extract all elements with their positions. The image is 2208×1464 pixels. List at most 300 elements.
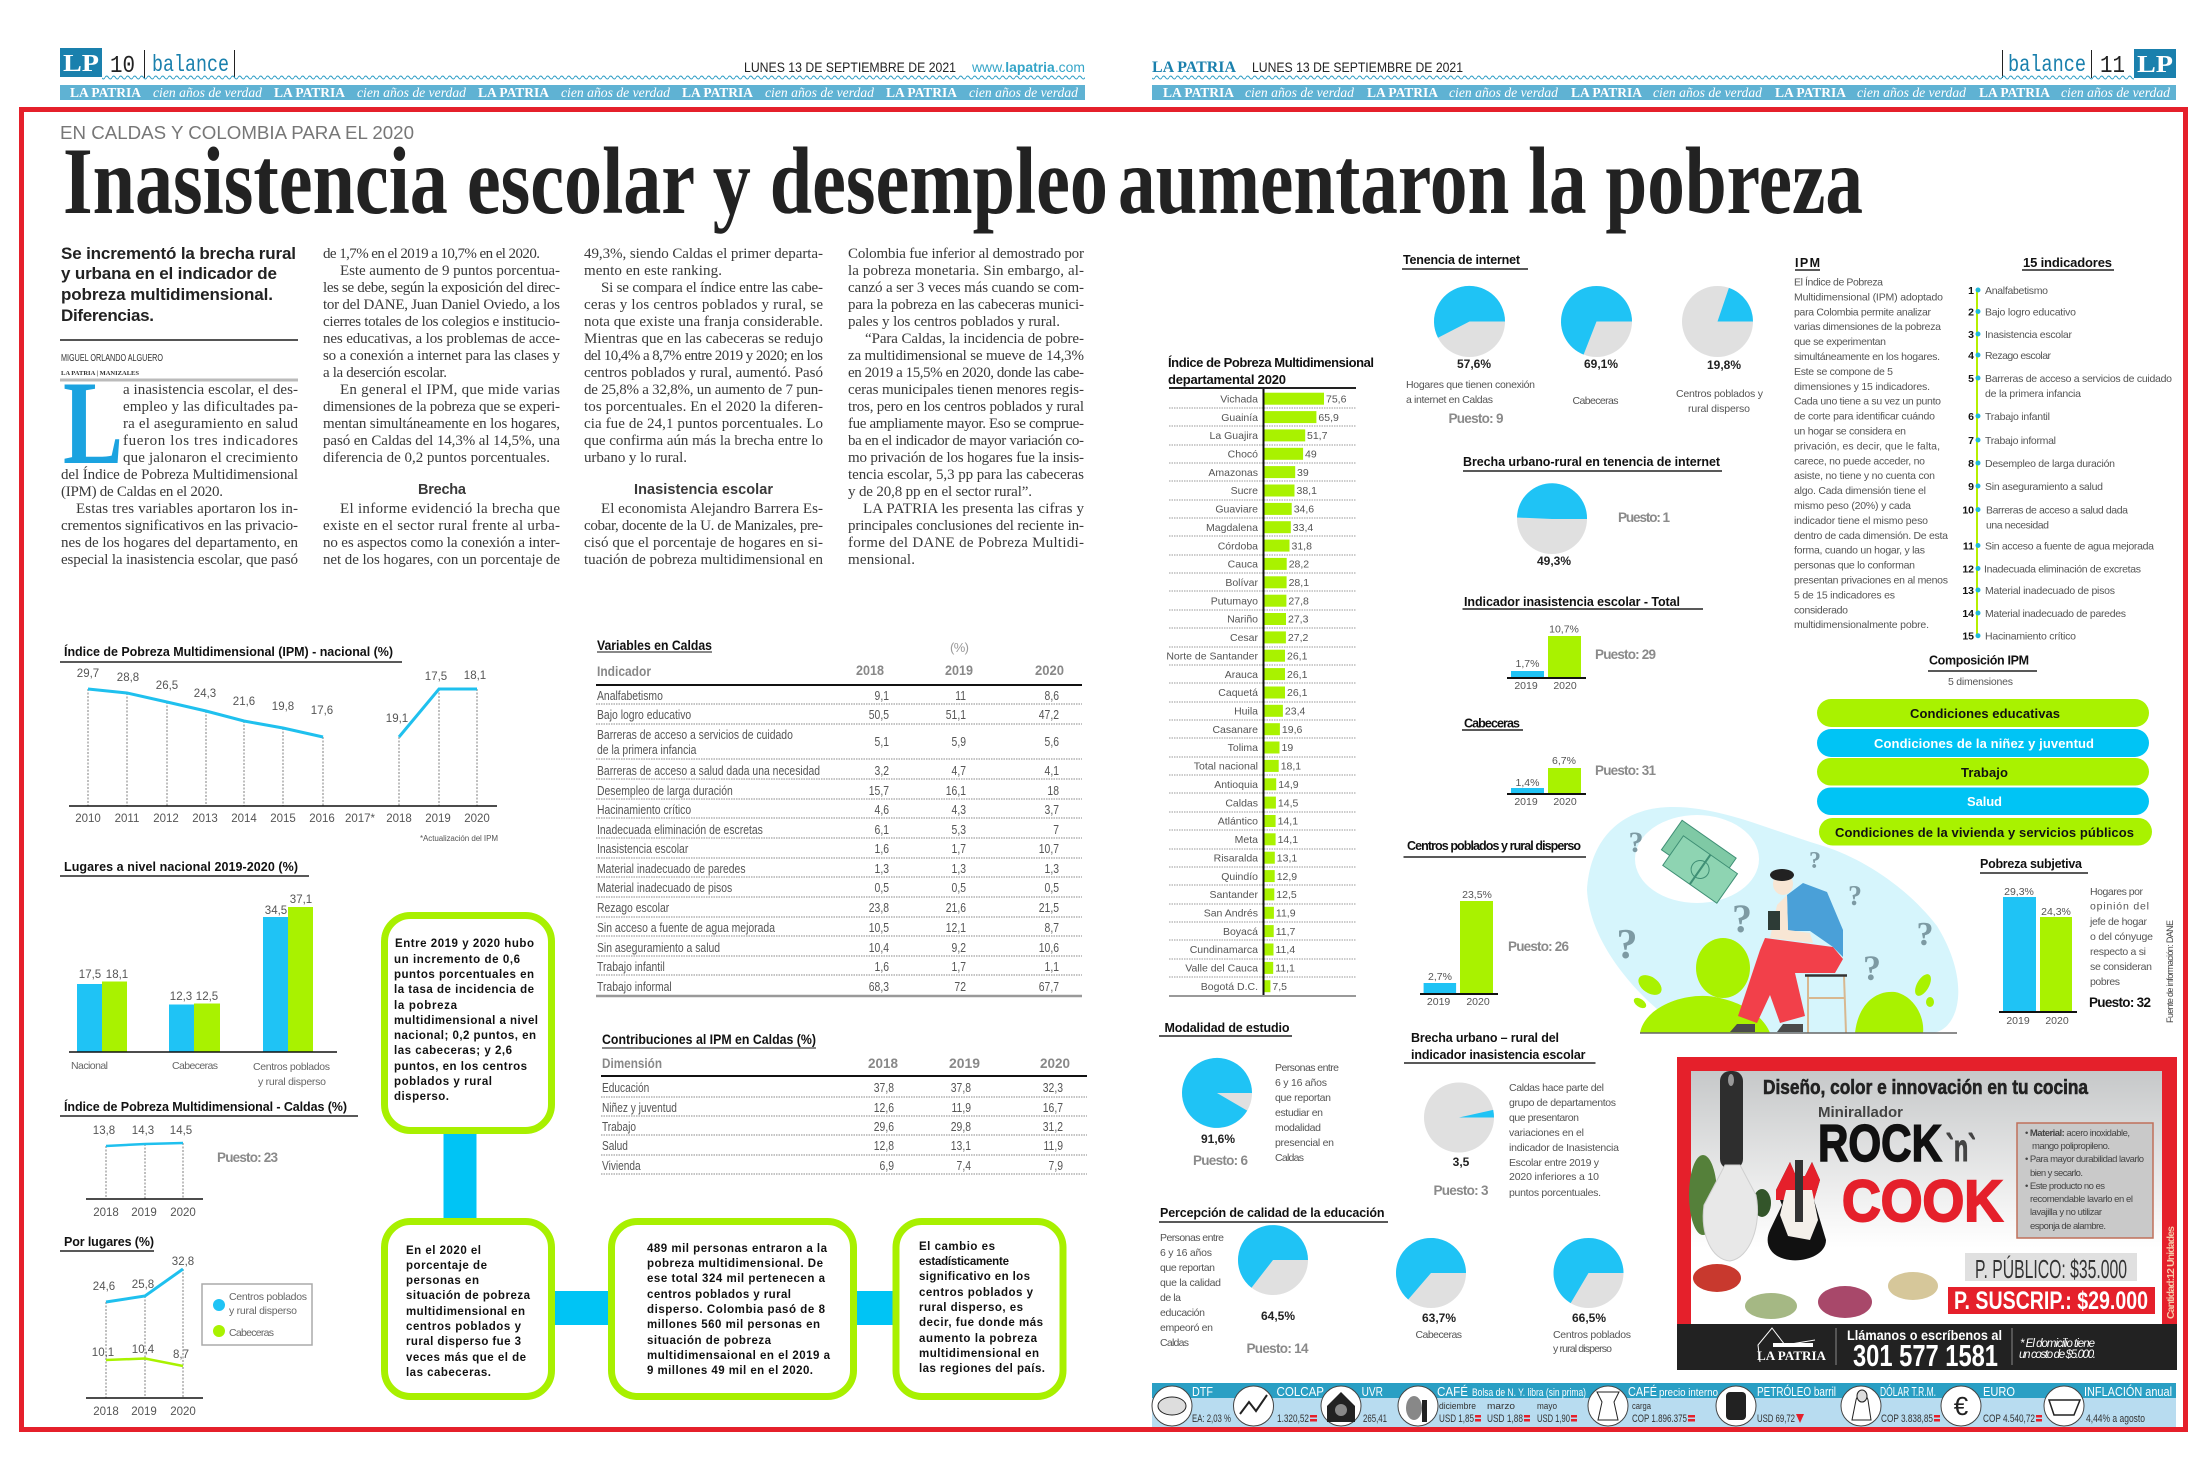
article column 2: net de los hogares, con un porcentaje de bbox=[323, 552, 560, 568]
IPM text: dentro de cada dimensión. De esta bbox=[1794, 530, 1948, 542]
ticker values: 265,41 bbox=[1363, 1413, 1387, 1425]
department values: 49 bbox=[1305, 448, 1317, 460]
article column 3 bbox=[584, 246, 824, 568]
pie 57,6%: 57,6% bbox=[1457, 357, 1491, 371]
ticker values: diciembre bbox=[1439, 1401, 1476, 1411]
rank: Puesto: 14 bbox=[1246, 1341, 1309, 1356]
header: right page masthead bbox=[1152, 49, 2176, 100]
article column 4: ceras municipales tienen menores regis- bbox=[848, 382, 1084, 398]
ticker values: COP 4.540,72 bbox=[1983, 1413, 2035, 1425]
department values: 14,1 bbox=[1278, 834, 1298, 846]
callout box 1: la pobreza bbox=[394, 1000, 458, 1012]
article column 3: mento en este ranking. bbox=[584, 263, 722, 279]
article column 2: dimensiones de la pobreza que se experi- bbox=[323, 399, 560, 415]
department values: 26,1 bbox=[1287, 669, 1308, 681]
article column 3: tos porcentuales. En el 2020 la diferen- bbox=[584, 399, 823, 415]
pie captions: rural disperso bbox=[1688, 403, 1750, 415]
panel: IPM nacional line chart bbox=[60, 644, 498, 843]
department values: 11,9 bbox=[1276, 908, 1296, 920]
delivery note: un costo de $5.000. bbox=[2019, 1349, 2096, 1361]
description: pobres bbox=[2090, 976, 2120, 988]
rank: Puesto: 3 bbox=[1434, 1183, 1489, 1198]
numbers: 13 bbox=[1962, 585, 1974, 597]
heading centros: Centros poblados y rural disperso bbox=[1407, 839, 1581, 853]
row labels: Salud bbox=[602, 1139, 628, 1153]
callout box 4: multidimensional en bbox=[919, 1348, 1039, 1360]
panel: pobreza subjetiva bbox=[1980, 857, 2153, 1027]
callout box 2: situación de pobreza bbox=[406, 1290, 531, 1302]
line series 2018-2020 bbox=[399, 689, 477, 737]
pie 66,5% bbox=[1553, 1238, 1631, 1355]
contact bar bbox=[1677, 1324, 2177, 1373]
heading departmental bbox=[1168, 355, 1374, 387]
department names: Caldas bbox=[1225, 797, 1258, 809]
bar values: 18,1 bbox=[106, 969, 128, 981]
values Caldas bbox=[93, 1125, 196, 1219]
2019 values: 11,9 bbox=[952, 1101, 971, 1115]
2020 values bbox=[1043, 1081, 1063, 1173]
pie 49,3% bbox=[1517, 483, 1587, 568]
ticker values: USD 1,85 bbox=[1439, 1413, 1474, 1425]
pie 49,3%: 49,3% bbox=[1537, 554, 1571, 568]
article column 2: En general el IPM, que mide varias bbox=[340, 382, 560, 398]
callout box 1: un incremento de 0,6 bbox=[394, 954, 520, 966]
2020 values: 1,3 bbox=[1045, 862, 1059, 876]
values: 21,6 bbox=[233, 696, 255, 708]
panel: brecha urbano-rural inasistencia bbox=[1404, 1031, 1619, 1199]
heading por lugares: Por lugares (%) bbox=[64, 1235, 154, 1249]
pill: vivienda: Condiciones de la vivienda y servicios públicos bbox=[1835, 825, 2134, 840]
callout box 2: personas en bbox=[406, 1275, 479, 1287]
LP logo left: LP bbox=[63, 51, 99, 77]
row labels: Niñez y juventud bbox=[602, 1101, 677, 1115]
row labels bbox=[602, 1081, 677, 1173]
band right: LA PATRIA bbox=[1775, 85, 1846, 100]
years: 2011 bbox=[115, 813, 139, 825]
indicator labels: Inasistencia escolar bbox=[1985, 329, 2072, 341]
2018 values: 6,9 bbox=[880, 1159, 894, 1173]
table title bbox=[597, 637, 969, 655]
row labels: Barreras de acceso a salud dada una necesidad bbox=[597, 764, 820, 778]
indicator labels: Material inadecuado de paredes bbox=[1985, 608, 2126, 620]
article column 2: a la deserción escolar. bbox=[323, 365, 447, 381]
bar values bbox=[79, 894, 312, 1003]
article column 4: za multidimensional se mueve de 14,3% bbox=[848, 348, 1084, 364]
legend: y rural disperso bbox=[229, 1305, 297, 1317]
callout box 1: la tasa de incidencia de bbox=[394, 984, 534, 996]
byline bbox=[60, 340, 298, 380]
values bbox=[77, 668, 486, 725]
years: 2015 bbox=[270, 813, 296, 825]
LP logo left bbox=[60, 48, 102, 77]
values: 2019 bbox=[1514, 680, 1538, 692]
table header: 2018 bbox=[868, 1056, 898, 1071]
department values: 27,3 bbox=[1288, 614, 1309, 626]
numbers: 7 bbox=[1968, 435, 1974, 447]
numbers bbox=[1962, 285, 1974, 643]
values: 2019 bbox=[1427, 996, 1450, 1008]
values bbox=[1427, 889, 1492, 1008]
values por lugares: 8,7 bbox=[173, 1349, 189, 1361]
callout box 1: Entre 2019 y 2020 hubo bbox=[395, 938, 534, 950]
band right: LA PATRIA bbox=[1367, 85, 1438, 100]
ticker headings: UVR bbox=[1362, 1384, 1383, 1399]
department values: 14,1 bbox=[1278, 816, 1298, 828]
IPM text: dimensiones y 15 indicadores. bbox=[1794, 381, 1930, 393]
article column 3: cobar, docente de la U. de Manizales, pre- bbox=[584, 518, 823, 534]
band right: LA PATRIA bbox=[1979, 85, 2050, 100]
panel: por lugares line chart bbox=[60, 1235, 312, 1418]
department names: Caquetá bbox=[1218, 687, 1258, 699]
article column 4: tencia escolar, 5,3 pp para las cabeceras bbox=[848, 467, 1084, 483]
description: de la bbox=[1160, 1292, 1181, 1304]
article column 3: cisó que el porcentaje de hogares en si- bbox=[584, 535, 823, 551]
question marks: ? bbox=[1848, 881, 1862, 912]
2018 values: 4,6 bbox=[875, 803, 889, 817]
callout box 2 bbox=[384, 1222, 552, 1396]
indicator labels: de la primera infancia bbox=[1985, 388, 2081, 400]
question marks bbox=[1616, 826, 1934, 988]
department names: Huila bbox=[1234, 706, 1258, 718]
delivery note bbox=[2019, 1338, 2096, 1361]
department names: Guainía bbox=[1221, 412, 1258, 424]
callout box 3: multidimensaional en el 2019 a bbox=[647, 1350, 831, 1362]
phone number: 301 577 1581 bbox=[1853, 1338, 1998, 1373]
values: 2020 bbox=[1466, 996, 1490, 1008]
panel: IPM explanation bbox=[1794, 256, 1948, 631]
page number 10 and section name: balance bbox=[152, 52, 229, 78]
2020 values: 1,1 bbox=[1045, 960, 1059, 974]
2018 values: 23,8 bbox=[869, 901, 889, 915]
department values: 34,6 bbox=[1294, 504, 1314, 516]
band left: LA PATRIA bbox=[682, 85, 753, 100]
timeline line bbox=[1976, 290, 1978, 636]
department values: 14,9 bbox=[1278, 779, 1299, 791]
pill: condiciones educativas: Condiciones educativas bbox=[1910, 706, 2060, 721]
row labels: de la primera infancia bbox=[597, 743, 697, 757]
panel: tenencia de internet bbox=[1402, 253, 1764, 426]
2019 values: 29,8 bbox=[951, 1120, 971, 1134]
ticker values: USD 69,72 bbox=[1757, 1413, 1795, 1425]
callout box 4: decir, fue donde más bbox=[919, 1317, 1043, 1329]
question marks: ? bbox=[1616, 922, 1638, 968]
article column 1: empleo y las dificultades pa- bbox=[123, 399, 298, 415]
numbers: 12 bbox=[1962, 564, 1974, 576]
line cabeceras bbox=[106, 1358, 183, 1366]
department names: Córdoba bbox=[1218, 540, 1258, 552]
values: 26,5 bbox=[156, 680, 178, 692]
article column 3: El economista Alejandro Barrera Es- bbox=[601, 501, 823, 517]
article column 2: les se debe, según la exposición del direc- bbox=[323, 280, 560, 296]
heading brecha inasistencia bbox=[1404, 1031, 1596, 1063]
numbers: 5 bbox=[1968, 373, 1974, 385]
article column 4: para la pobreza en las cabeceras munici- bbox=[848, 297, 1084, 313]
values: 19,8 bbox=[272, 701, 294, 713]
department names: Tolima bbox=[1228, 742, 1258, 754]
line centros poblados bbox=[106, 1269, 183, 1302]
pie 69,1% bbox=[1561, 286, 1632, 371]
ticker values: carga bbox=[1632, 1401, 1651, 1411]
description: que la calidad bbox=[1160, 1277, 1221, 1289]
man figure bbox=[1730, 869, 1843, 1032]
2020 values: 47,2 bbox=[1039, 708, 1059, 722]
IPM text: Este se compone de 5 bbox=[1794, 366, 1893, 378]
values por lugares: 2019 bbox=[131, 1406, 157, 1418]
callout box 4: las regiones del país. bbox=[919, 1363, 1045, 1375]
ticker headings: DÓLAR T.R.M. bbox=[1880, 1384, 1936, 1399]
department names: Sucre bbox=[1231, 485, 1258, 497]
2018 values: 68,3 bbox=[869, 980, 889, 994]
department names: Casanare bbox=[1212, 724, 1258, 736]
category labels: Nacional bbox=[71, 1060, 108, 1072]
heading IPM Caldas: Índice de Pobreza Multidimensional - Caldas (%) bbox=[64, 1099, 347, 1114]
article column 2: cierres totales de los colegios e institucio- bbox=[323, 314, 560, 330]
band left: LA PATRIA bbox=[886, 85, 957, 100]
section name and page number 11: balance bbox=[2008, 52, 2086, 78]
food: lettuce bbox=[1689, 1155, 1771, 1235]
values Caldas: 13,8 bbox=[93, 1125, 115, 1137]
values: 28,8 bbox=[117, 672, 139, 684]
legend: Cabeceras bbox=[229, 1327, 274, 1339]
IPM text: algo. Cada dimensión tiene el bbox=[1794, 485, 1926, 497]
Cook logo: COOK bbox=[1842, 1169, 2003, 1234]
department values: 27,8 bbox=[1288, 595, 1309, 607]
description: estudiar en bbox=[1275, 1107, 1323, 1119]
rank: Puesto: 23 bbox=[217, 1150, 278, 1165]
ticker values: USD 1,90 bbox=[1537, 1413, 1570, 1425]
description: Personas entre bbox=[1275, 1062, 1339, 1074]
department names: Meta bbox=[1235, 834, 1258, 846]
values: 6,7% bbox=[1552, 755, 1576, 767]
2019 values: 11 bbox=[955, 689, 966, 703]
bar values: 12,3 bbox=[170, 991, 192, 1003]
date and url left: www.lapatria.com bbox=[971, 59, 1085, 75]
2018 values: 6,1 bbox=[875, 823, 889, 837]
band left: LA PATRIA bbox=[478, 85, 549, 100]
values: 18,1 bbox=[464, 670, 486, 682]
section name and page number 11 bbox=[2002, 50, 2125, 80]
description: se consideran bbox=[2090, 961, 2152, 973]
table: variables en Caldas bbox=[596, 637, 1082, 996]
row labels: Barreras de acceso a servicios de cuidado bbox=[597, 728, 793, 742]
pie 3,5 bbox=[1424, 1082, 1494, 1169]
heading cabeceras: Cabeceras bbox=[1464, 716, 1520, 730]
byline: MIGUEL ORLANDO ALGUERO bbox=[61, 353, 163, 364]
numbers: 2 bbox=[1968, 306, 1974, 318]
values: 2019 bbox=[2006, 1015, 2030, 1027]
heading brecha inasistencia: indicador inasistencia escolar bbox=[1411, 1048, 1586, 1062]
panel: centros poblados bars bbox=[1404, 839, 1586, 1008]
heading 15 indicadores: 15 indicadores bbox=[2023, 255, 2112, 270]
department values: 11,7 bbox=[1276, 926, 1296, 938]
IPM text: varias dimensiones de la pobreza bbox=[1794, 321, 1941, 333]
grater bbox=[1703, 1071, 1758, 1261]
2020 values: 5,6 bbox=[1045, 735, 1059, 749]
IPM text: para Colombia permite analizar bbox=[1794, 306, 1932, 318]
heading tenencia: Tenencia de internet bbox=[1403, 253, 1521, 267]
department values: 27,2 bbox=[1288, 632, 1308, 644]
description: que reportan bbox=[1160, 1262, 1215, 1274]
values: 1,7% bbox=[1516, 658, 1539, 670]
years: 2013 bbox=[192, 813, 218, 825]
2019 values: 1,7 bbox=[952, 842, 966, 856]
connector horizontal 2 bbox=[857, 1291, 893, 1325]
call to action: Llámanos o escríbenos al bbox=[1847, 1327, 2002, 1343]
pie 64,5% bbox=[1238, 1225, 1308, 1323]
description bbox=[1275, 1062, 1339, 1164]
IPM text: mismo peso (20%) y cada bbox=[1794, 500, 1911, 512]
2020 values: 7,9 bbox=[1049, 1159, 1063, 1173]
LP logo right: LP bbox=[2137, 52, 2173, 78]
question marks: ? bbox=[1916, 916, 1934, 953]
values Caldas: 2020 bbox=[170, 1207, 196, 1219]
indicator labels: Barreras de acceso a salud dada bbox=[1986, 505, 2128, 517]
food piles bbox=[1693, 1264, 1938, 1319]
2018 values: 1,3 bbox=[875, 862, 889, 876]
article column 2: de 1,7% en el 2019 a 10,7% en el 2020. bbox=[323, 246, 540, 262]
department values: 26,1 bbox=[1287, 650, 1308, 662]
title: aumentaron la pobreza bbox=[1118, 128, 1863, 234]
table header: Dimensión bbox=[602, 1056, 662, 1071]
thought cloud bbox=[1635, 815, 1759, 903]
band left: LA PATRIA bbox=[70, 85, 141, 100]
2018 values: 3,2 bbox=[875, 764, 889, 778]
pie captions: Hogares que tienen conexión bbox=[1406, 379, 1535, 391]
2019 values: 16,1 bbox=[946, 784, 966, 798]
indicator labels: Inadecuada eliminación de excretas bbox=[1984, 564, 2141, 576]
deck bbox=[61, 244, 296, 325]
row labels: Trabajo infantil bbox=[597, 960, 665, 974]
values: 2020 bbox=[1553, 796, 1577, 808]
department values: 11,4 bbox=[1276, 944, 1295, 956]
ticker headings: Bolsa de N. Y. libra (sin prima) bbox=[1472, 1387, 1586, 1399]
legend bbox=[202, 1284, 312, 1345]
kicker: EN CALDAS Y COLOMBIA PARA EL 2020 bbox=[60, 123, 414, 143]
pie captions: Centros poblados y bbox=[1676, 388, 1764, 400]
department names: Bogotá D.C. bbox=[1201, 981, 1258, 993]
values bbox=[1514, 624, 1579, 692]
indicator labels: Sin acceso a fuente de agua mejorada bbox=[1985, 540, 2154, 552]
description: o del cónyuge bbox=[2090, 931, 2153, 943]
article column 4 bbox=[848, 246, 1084, 568]
department values: 7,5 bbox=[1272, 981, 1287, 993]
ticker headings: EURO bbox=[1983, 1384, 2015, 1399]
specs box bbox=[2017, 1123, 2153, 1238]
years: 2017* bbox=[345, 813, 376, 825]
numbers: 9 bbox=[1968, 481, 1974, 493]
2019 values: 13,1 bbox=[951, 1139, 971, 1153]
years: 2012 bbox=[153, 813, 179, 825]
department values: 75,6 bbox=[1326, 393, 1347, 405]
values por lugares: 25,8 bbox=[132, 1279, 154, 1291]
indicator labels: Trabajo informal bbox=[1985, 435, 2056, 447]
IPM text: Multidimensional (IPM) adoptado bbox=[1794, 291, 1943, 303]
IPM text: un hogar se considera en bbox=[1794, 426, 1906, 438]
department values: 11,1 bbox=[1275, 963, 1295, 975]
pie 19,8% bbox=[1682, 286, 1753, 372]
values por lugares: 32,8 bbox=[172, 1256, 194, 1268]
row labels: Hacinamiento crítico bbox=[597, 803, 692, 817]
article column 4: mensional. bbox=[848, 552, 915, 568]
deck: y urbana en el indicador de bbox=[61, 264, 277, 283]
panel: IPM Caldas line chart bbox=[60, 1099, 358, 1219]
numbers: 11 bbox=[1963, 540, 1974, 552]
heading departmental: departamental 2020 bbox=[1168, 372, 1286, 387]
ticker icons bbox=[1152, 1386, 2084, 1426]
subscriber price: P. SUSCRIP.: $29.000 bbox=[1954, 1287, 2148, 1315]
ticker headings: CAFÉ bbox=[1437, 1384, 1468, 1399]
category labels bbox=[71, 1060, 330, 1088]
pie 64,5%: 64,5% bbox=[1261, 1309, 1295, 1323]
numbers: 14 bbox=[1962, 608, 1974, 620]
indicator labels: Barreras de acceso a servicios de cuidado bbox=[1985, 373, 2172, 385]
article column 3: Inasistencia escolar bbox=[634, 482, 773, 498]
department values: 19,6 bbox=[1282, 724, 1302, 736]
specs box: • Para mayor durabilidad lavarlo bbox=[2025, 1154, 2144, 1165]
2018 values: 10,4 bbox=[869, 941, 889, 955]
callout box 1: nacional; 0,2 puntos, en bbox=[394, 1030, 536, 1042]
years: 2020 bbox=[464, 813, 490, 825]
table header: 2020 bbox=[1040, 1056, 1070, 1071]
2020 values bbox=[1039, 689, 1059, 994]
values: 2020 bbox=[2045, 1015, 2069, 1027]
callout box 2: multidimensional en bbox=[406, 1306, 525, 1318]
rank: Puesto: 1 bbox=[1618, 510, 1670, 525]
article column 1: (IPM) de Caldas en el 2020. bbox=[61, 484, 223, 500]
IPM text: 5 de 15 indicadores es bbox=[1794, 589, 1895, 601]
bar values: 34,5 bbox=[265, 905, 287, 917]
rank: Puesto: 26 bbox=[1508, 939, 1569, 954]
date and url left: LUNES 13 DE SEPTIEMBRE DE 2021 bbox=[744, 59, 956, 75]
callout box 4: significativo en los bbox=[919, 1271, 1030, 1283]
IPM text: carece, no puede acceder, no bbox=[1794, 455, 1925, 467]
row labels: Sin aseguramiento a salud bbox=[597, 941, 720, 955]
callout box 4: El cambio es bbox=[919, 1241, 995, 1253]
band right: cien años de verdad bbox=[1449, 85, 1558, 100]
row labels: Analfabetismo bbox=[597, 689, 663, 703]
ticker values: USD 1,88 bbox=[1487, 1413, 1523, 1425]
pill: vivienda bbox=[1819, 818, 2152, 846]
pie 19,8%: 19,8% bbox=[1707, 358, 1741, 372]
pie 66,5%: y rural disperso bbox=[1553, 1343, 1612, 1355]
heading IPM nacional: Índice de Pobreza Multidimensional (IPM) - nacional (%) bbox=[64, 644, 393, 659]
IPM text: privación, es decir, que le falta, bbox=[1794, 440, 1940, 452]
department values: 18,1 bbox=[1281, 761, 1301, 773]
2020 values: 10,7 bbox=[1039, 842, 1059, 856]
department names: Vichada bbox=[1220, 393, 1258, 405]
department names: Total nacional bbox=[1194, 761, 1258, 773]
deck: pobreza multidimensional. bbox=[61, 285, 273, 304]
2019 values: 9,2 bbox=[952, 941, 966, 955]
public price bbox=[1965, 1253, 2137, 1284]
years: 2016 bbox=[309, 813, 335, 825]
ticker values: mayo bbox=[1537, 1401, 1557, 1411]
article column 3: 49,3%, siendo Caldas el primer departa- bbox=[584, 246, 823, 262]
callout box 3: 489 mil personas entraron a la bbox=[647, 1243, 828, 1255]
callout box 1: disperso. bbox=[394, 1091, 449, 1103]
band right: cien años de verdad bbox=[2061, 85, 2170, 100]
2020 values: 3,7 bbox=[1045, 803, 1059, 817]
band left: LA PATRIA bbox=[274, 85, 345, 100]
department names: Amazonas bbox=[1208, 467, 1258, 479]
article column 1: del Índice de Pobreza Multidimensional bbox=[61, 466, 298, 483]
department names: Chocó bbox=[1228, 448, 1258, 460]
department names: Boyacá bbox=[1223, 926, 1258, 938]
row labels bbox=[597, 689, 820, 994]
indicator labels: Sin aseguramiento a salud bbox=[1985, 481, 2103, 493]
2019 values: 12,1 bbox=[946, 921, 966, 935]
bars bbox=[1507, 768, 1586, 794]
